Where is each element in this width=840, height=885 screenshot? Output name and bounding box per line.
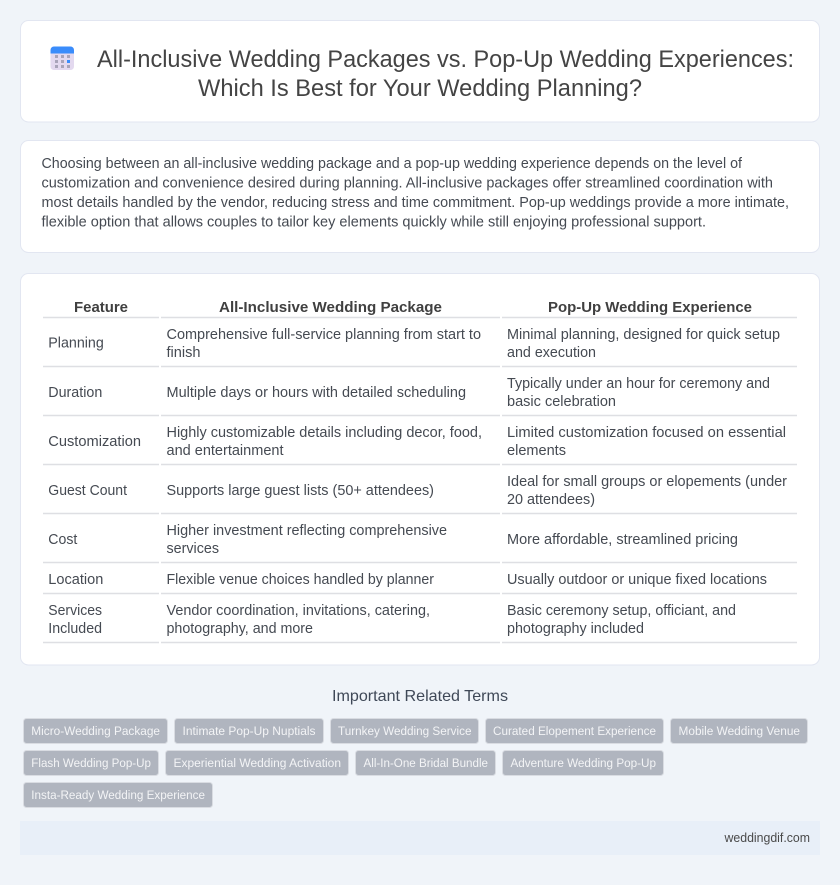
table row: services included: Included [48, 621, 102, 637]
footer [20, 821, 820, 855]
table row: customization: Limited customization focused on essential [507, 425, 786, 441]
text block: introduction paragraph [42, 156, 789, 230]
table row: planning: Planning [48, 336, 104, 352]
table header [43, 299, 797, 318]
tag [356, 750, 496, 776]
table row: planning: and execution [507, 345, 596, 361]
table row: location [43, 572, 797, 594]
table row: customization: elements [507, 443, 566, 459]
tag: All-In-One Bridal Bundle [364, 756, 488, 770]
tags: related terms [24, 718, 808, 808]
table row: guest count: Guest Count [48, 483, 127, 499]
table row: customization: Customization [48, 434, 141, 450]
table header: All-Inclusive Wedding Package [219, 299, 442, 316]
table row: cost: Cost [48, 532, 77, 548]
table row: guest count: Supports large guest lists (50+ attendees) [166, 483, 434, 499]
table row: services included [43, 603, 797, 642]
tag: Insta-Ready Wedding Experience [31, 788, 205, 802]
table row: cost [43, 523, 797, 562]
table row: services included: Services [48, 603, 102, 619]
tag [174, 718, 324, 744]
tag: Intimate Pop-Up Nuptials [182, 724, 316, 738]
table row: duration: Typically under an hour for ceremony and [507, 376, 770, 392]
table row: cost: More affordable, streamlined pricing [507, 532, 738, 548]
title [97, 46, 794, 102]
table row: services included: photography included [507, 621, 644, 637]
table row: duration [43, 376, 797, 416]
title: Which Is Best for Your Wedding Planning? [198, 75, 642, 102]
table row: services included: photography, and more [166, 621, 313, 637]
table header: Feature [74, 299, 128, 316]
table row: location: Flexible venue choices handled by planner [166, 572, 434, 588]
heading: important related terms: Important Related Terms [332, 688, 508, 705]
tag [486, 718, 664, 744]
table row: planning: Minimal planning, designed for quick setup [507, 327, 780, 343]
tag: Curated Elopement Experience [493, 724, 656, 738]
table row: guest count: 20 attendees) [507, 492, 595, 508]
table row: cost: services [166, 541, 219, 557]
table row: planning: Comprehensive full-service planning from start to [166, 327, 481, 343]
table row: customization [43, 425, 797, 464]
text block: introduction paragraph: flexible option that allows couples to tailor key elements quickly while still enjoying professional support. [42, 214, 706, 230]
table row: cost: Higher investment reflecting comprehensive [166, 523, 447, 539]
table row: planning: finish [166, 345, 200, 361]
table row: planning [43, 327, 797, 366]
tag [24, 718, 168, 744]
table row: customization: and entertainment [166, 443, 284, 459]
icon: calendar [50, 46, 74, 70]
footer source text: weddingdif.com [724, 830, 810, 845]
tag: Adventure Wedding Pop-Up [510, 756, 656, 770]
tag [24, 750, 158, 776]
tag [166, 750, 348, 776]
tag: Micro-Wedding Package [31, 724, 160, 738]
text block: introduction paragraph: most details handled by the vendor, reducing stress and time commitment. Pop-up weddings provide a more intimate, [42, 195, 789, 211]
table row: duration: Duration [48, 385, 102, 401]
panel: title card [20, 20, 820, 122]
table row: location: Location [48, 572, 103, 588]
tag: Mobile Wedding Venue [678, 724, 800, 738]
table row: guest count [43, 474, 797, 514]
tag [670, 718, 808, 744]
tag: Flash Wedding Pop-Up [31, 756, 151, 770]
text block: introduction paragraph: Choosing between an all-inclusive wedding package and a pop-up wedding experience depends on the level of [42, 156, 743, 172]
table row: customization: Highly customizable details including decor, food, [166, 425, 482, 441]
table row: services included: Vendor coordination, invitations, catering, [166, 603, 430, 619]
table header: Pop-Up Wedding Experience [548, 299, 752, 316]
panel: introduction [20, 140, 820, 252]
table row: duration: Multiple days or hours with detailed scheduling [166, 385, 466, 401]
tag [330, 718, 478, 744]
tag: Turnkey Wedding Service [338, 724, 472, 738]
text block: introduction paragraph: customization and convenience desired during planning. All-inclusive packages offer streamlined coordination with [42, 176, 773, 192]
table row: duration: basic celebration [507, 394, 616, 410]
table row: services included: Basic ceremony setup, officiant, and [507, 603, 736, 619]
tag [24, 782, 212, 808]
tag [502, 750, 664, 776]
tag: Experiential Wedding Activation [174, 756, 341, 770]
title: All-Inclusive Wedding Packages vs. Pop-Up Wedding Experiences: [97, 46, 794, 73]
panel: comparison table [20, 274, 820, 665]
table row: location: Usually outdoor or unique fixed locations [507, 572, 767, 588]
table row: guest count: Ideal for small groups or elopements (under [507, 474, 787, 490]
